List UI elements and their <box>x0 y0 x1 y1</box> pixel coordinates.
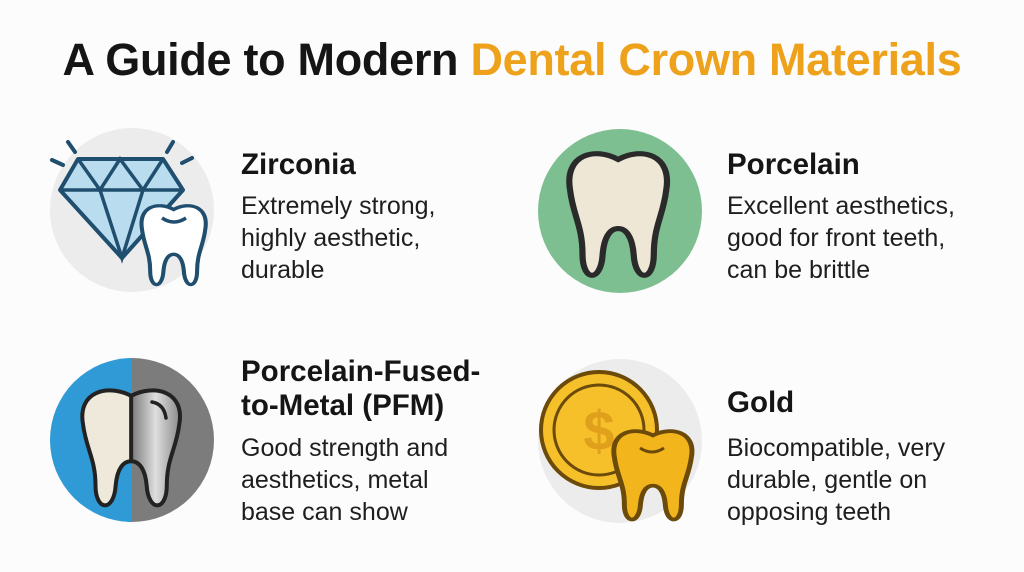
text: porcelain <box>727 192 955 284</box>
text: PFM: aesthetics, metal <box>241 466 429 494</box>
text: zirconia: Extremely strong, <box>241 192 436 220</box>
heading: gold: Gold <box>727 386 794 419</box>
text: PFM <box>241 434 448 526</box>
text: gold <box>727 434 945 526</box>
text: PFM: base can show <box>241 498 408 526</box>
text: PFM: Good strength and <box>241 434 448 462</box>
title: A Guide to Modern Dental Crown Materials <box>63 34 961 85</box>
text: zirconia: highly aesthetic, <box>241 224 420 252</box>
text: zirconia <box>241 192 436 284</box>
icon: porcelain tooth <box>538 129 702 293</box>
heading: PFM <box>241 355 480 422</box>
icon: gold coin and tooth: $ <box>583 399 615 462</box>
text: porcelain: Excellent aesthetics, <box>727 192 955 220</box>
icon: PFM half tooth <box>50 358 214 522</box>
heading: zirconia: Zirconia <box>241 148 356 181</box>
text: gold: Biocompatible, very <box>727 434 945 462</box>
heading: porcelain: Porcelain <box>727 148 860 181</box>
icon: zirconia diamond and tooth <box>50 128 214 292</box>
text: porcelain: good for front teeth, <box>727 224 945 252</box>
icon: gold coin and tooth <box>538 359 702 523</box>
heading: PFM: to-Metal (PFM) <box>241 389 444 422</box>
text: porcelain: can be brittle <box>727 256 870 284</box>
text: gold: opposing teeth <box>727 498 891 526</box>
text: zirconia: durable <box>241 256 324 284</box>
text: gold: durable, gentle on <box>727 466 927 494</box>
heading: PFM: Porcelain-Fused- <box>241 355 480 388</box>
